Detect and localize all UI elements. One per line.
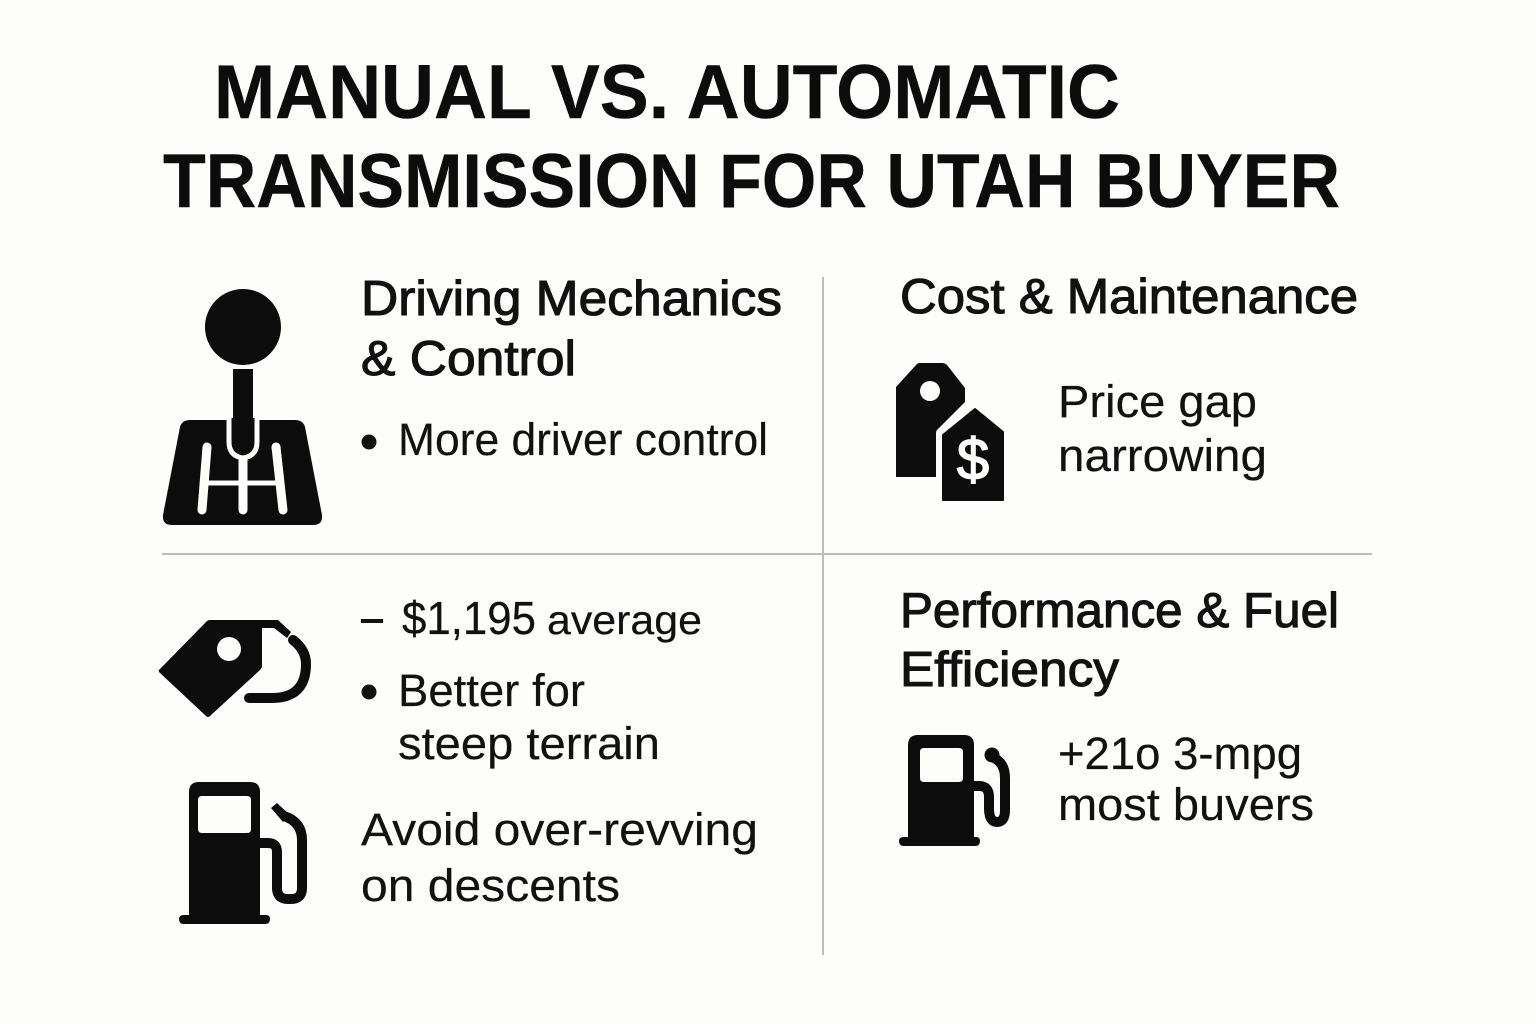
text: price gap narrowing: Price gap [1058,376,1257,427]
heading: performance and fuel efficiency [900,584,1339,697]
icon: gear shifter [163,289,322,525]
text: price average [361,592,702,644]
bullet: better for steep terrain [362,665,660,769]
text: price average: average [547,597,702,643]
title: MANUAL VS. AUTOMATIC [214,50,1120,135]
text: price gap narrowing [1058,376,1267,481]
heading: driving mechanics and control [361,272,782,386]
panel: driving mechanics and control [163,272,782,525]
panel: manual price and terrain notes [159,592,758,924]
text: avoid over-revving on descents: Avoid over-revving [361,804,758,855]
text: price gap narrowing: narrowing [1058,430,1267,481]
text: mpg most buyers [1058,728,1314,830]
text: avoid over-revving on descents: on descents [361,860,620,911]
panel: cost and maintenance [896,270,1358,500]
icon: price tag with loop [159,620,306,717]
heading: cost and maintenance: Cost & Maintenance [900,270,1358,324]
text: mpg most buyers: +21o 3-mpg [1058,728,1302,779]
text: avoid over-revving on descents [361,804,758,911]
icon: fuel pump small [899,735,1005,846]
icon: price tags [896,363,1003,500]
title [163,50,1340,224]
text: mpg most buyers: most buvers [1058,779,1314,830]
text: price average: $1,195 [402,592,536,644]
bullet: more driver control: More driver control [398,414,768,465]
heading: driving mechanics and control: Driving Mechanics [361,272,782,326]
icon: fuel pump [179,782,302,924]
title: TRANSMISSION FOR UTAH BUYER [163,139,1340,224]
heading: driving mechanics and control: & Control [361,332,576,386]
panel: performance and fuel efficiency [899,584,1339,846]
bullet: better for steep terrain: Better for [398,665,585,716]
heading: performance and fuel efficiency: Performance & Fuel [900,584,1339,638]
heading: performance and fuel efficiency: Efficiency [900,643,1120,697]
bullet: better for steep terrain: steep terrain [398,718,660,769]
icon: price tags: $ [957,427,989,492]
